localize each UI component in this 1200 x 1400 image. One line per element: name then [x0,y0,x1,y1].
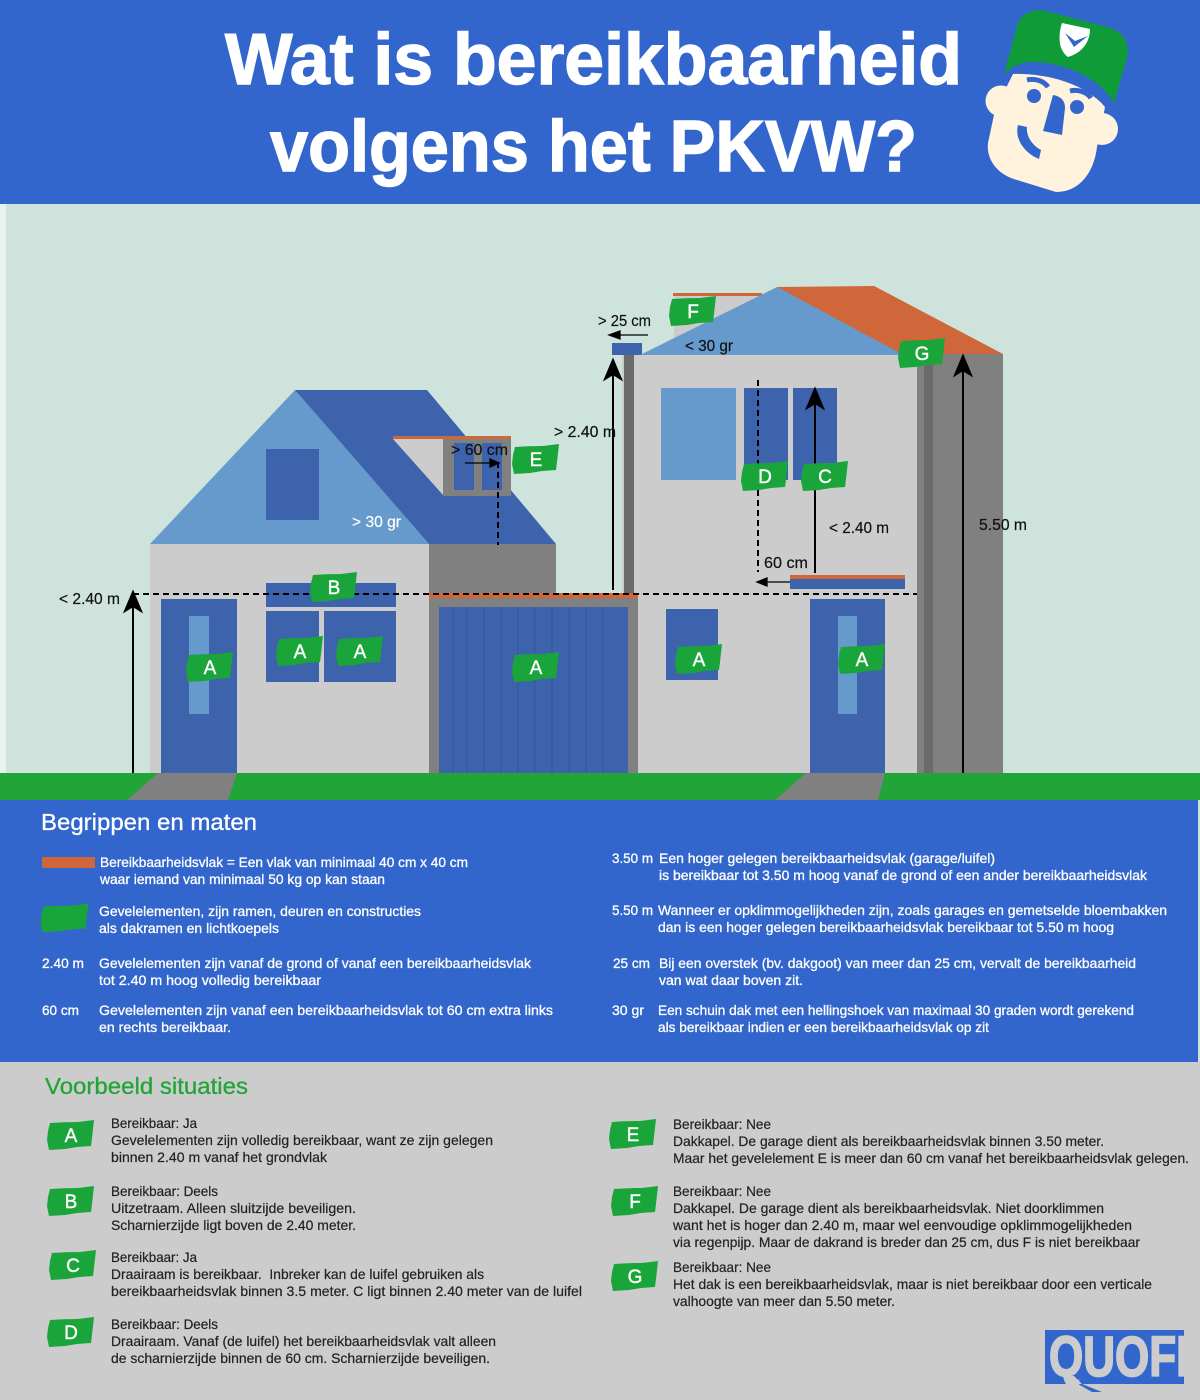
letter badges on house: A [294,642,307,663]
situation E: Maar het gevelelement E is meer dan 60 cm vanaf het bereikbaarheidsvlak gelegen. [673,1150,1189,1166]
measurement labels: > 30 gr [352,514,401,531]
definition: 2.40 m: Gevelelementen zijn vanaf de grond of vanaf een bereikbaarheidsvlak [99,955,532,971]
situation G: G [628,1267,642,1288]
letter badges on house [186,296,945,682]
definition: 25 cm: Bij een overstek (bv. dakgoot) van meer dan 25 cm, vervalt de bereikbaarheid [659,955,1136,971]
situation F: F [629,1192,641,1213]
letter badges on house: A [354,642,367,663]
definition: 60 cm: Gevelelementen zijn vanaf een bereikbaarheidsvlak tot 60 cm extra links [99,1002,553,1018]
definition: 5.50 m: Wanneer er opklimmogelijkheden zijn, zoals garages en gemetselde bloembakken [658,902,1167,918]
situation D [47,1316,496,1366]
situation G [611,1259,1152,1309]
measurement labels: > 60 cm [451,442,508,459]
situation D: de scharnierzijde binnen de 60 cm. Scharnierzijde beveiligen. [111,1350,490,1366]
situation G: valhoogte van meer dan 5.50 meter. [673,1293,895,1309]
situation E: E [627,1125,639,1146]
situation B: Uitzetraam. Alleen sluitzijde beveiligen. [111,1200,356,1216]
measurement labels: < 2.40 m [59,591,120,608]
letter badges on house: E [530,450,542,471]
definition: bereikbaarheidsvlak: Bereikbaarheidsvlak = Een vlak van minimaal 40 cm x 40 cm [100,854,468,870]
situation B [47,1183,356,1233]
letter badges on house: D [758,467,772,488]
letter badges on house: A [693,650,706,671]
letter badges on house: A [856,650,869,671]
measurement labels: > 25 cm [598,313,651,330]
situation F: via regenpijp. Maar de dakrand is breder dan 25 cm, dus F is niet bereikbaar [673,1234,1140,1250]
legend: green swatch [41,904,88,932]
definition: 30 gr: Een schuin dak met een hellingshoek van maximaal 30 graden wordt gerekend [658,1002,1134,1018]
letter badges on house: F [687,302,699,323]
heading: Voorbeeld situaties [45,1073,248,1099]
definition: gevelelementen: Gevelelementen, zijn ramen, deuren en constructies [99,903,421,919]
measurement labels: < 2.40 m [829,520,889,537]
measurement labels [59,313,1027,608]
situation C [49,1249,582,1299]
title [225,20,962,187]
letter badges on house: B [328,578,340,599]
situation F: Dakkapel. De garage dient als bereikbaarheidsvlak. Niet doorklimmen [673,1200,1104,1216]
definition: 3.50 m: 3.50 m [612,850,653,866]
dashed reference lines [133,380,917,594]
situation D: Bereikbaar: Deels [111,1316,218,1332]
garage [429,593,638,773]
definition: bereikbaarheidsvlak [99,854,468,887]
letter badges on house: C [818,467,832,488]
panel: begrippen en maten [0,800,1200,1062]
letter badges on house: G [915,344,929,365]
situation D: D [64,1323,78,1344]
situation F: Bereikbaar: Nee [673,1183,771,1199]
definition: 30 gr [612,1002,1134,1035]
left house [150,390,556,773]
situation F: want het is hoger dan 2.40 m, maar wel eenvoudige opklimmogelijkheden [672,1217,1132,1233]
situation C: Draairaam is bereikbaar. Inbreker kan de luifel gebruiken als [111,1266,484,1282]
definition: bereikbaarheidsvlak: waar iemand van minimaal 50 kg op kan staan [99,871,385,887]
situation F [611,1183,1140,1250]
title: volgens het PKVW? [270,107,917,187]
letter badges on house: A [204,658,217,679]
legend: orange swatch [42,857,95,868]
definition: gevelelementen [99,903,421,936]
ground with paths [0,773,1200,800]
definition: 3.50 m: Een hoger gelegen bereikbaarheidsvlak (garage/luifel) [659,850,995,866]
situation B: Bereikbaar: Deels [111,1183,218,1199]
definition: 60 cm: en rechts bereikbaar. [99,1019,231,1035]
situation E: Bereikbaar: Nee [673,1116,771,1132]
situation D: Draairaam. Vanaf (de luifel) het bereikbaarheidsvlak valt alleen [111,1333,496,1349]
situation C: bereikbaarheidsvlak binnen 3.5 meter. C ligt binnen 2.40 meter van de luifel [111,1283,582,1299]
sky background [0,204,1200,774]
definition: 60 cm [42,1002,553,1035]
situation C: Bereikbaar: Ja [111,1249,197,1265]
definition: 60 cm: 60 cm [42,1002,79,1018]
situation G: Het dak is een bereikbaarheidsvlak, maar is niet bereikbaar door een verticale [673,1276,1152,1292]
situation B: B [65,1192,77,1213]
header band [0,0,1200,204]
measurement labels: < 30 gr [685,338,733,355]
right house [612,286,1003,773]
letter badges on house: A [530,658,543,679]
panel: house illustration [0,204,1200,800]
definition: 5.50 m [612,902,1167,935]
measurement labels: 5.50 m [979,517,1027,534]
definition: 3.50 m [612,850,1148,883]
definition: 25 cm: 25 cm [613,955,650,971]
arrows [125,331,971,773]
measurement labels: 60 cm [764,555,808,572]
definition: 5.50 m: dan is een hoger gelegen bereikbaarheidsvlak bereikbaar tot 5.50 m hoog [658,919,1114,935]
definition: 2.40 m [42,955,532,988]
situation E: Dakkapel. De garage dient als bereikbaarheidsvlak binnen 3.50 meter. [673,1133,1104,1149]
definition: 2.40 m: tot 2.40 m hoog volledig bereikbaar [99,972,321,988]
definition: 3.50 m: is bereikbaar tot 3.50 m hoog vanaf de grond of een ander bereikbaarheidsvlak [659,867,1148,883]
situation G: Bereikbaar: Nee [673,1259,771,1275]
definition: 25 cm: van wat daar boven zit. [659,972,803,988]
situation E [609,1116,1189,1166]
situation A: Bereikbaar: Ja [111,1115,197,1131]
definition: 2.40 m: 2.40 m [42,955,84,971]
situation A: binnen 2.40 m vanaf het grondvlak [111,1149,328,1165]
definition: 5.50 m: 5.50 m [612,902,653,918]
dormer [393,436,511,496]
panel: voorbeeld situaties [0,1062,1200,1400]
situation B: Scharnierzijde ligt boven de 2.40 meter. [111,1217,356,1233]
situation C: C [66,1256,80,1277]
definition: 30 gr: 30 gr [612,1002,644,1018]
heading: Begrippen en maten [41,809,257,835]
title: Wat is bereikbaarheid [225,20,962,100]
situation A [47,1115,493,1165]
situation A: A [65,1126,78,1147]
definition: 25 cm [613,955,1136,988]
situation A: Gevelelementen zijn volledig bereikbaar, want ze zijn gelegen [111,1132,493,1148]
measurement labels: > 2.40 m [554,424,616,441]
definition: 30 gr: als bereikbaar indien er een bereikbaarheidsvlak op zit [658,1019,989,1035]
icon: mascot face with green cap [986,10,1128,192]
definition: gevelelementen: als dakramen en lichtkoepels [99,920,279,936]
